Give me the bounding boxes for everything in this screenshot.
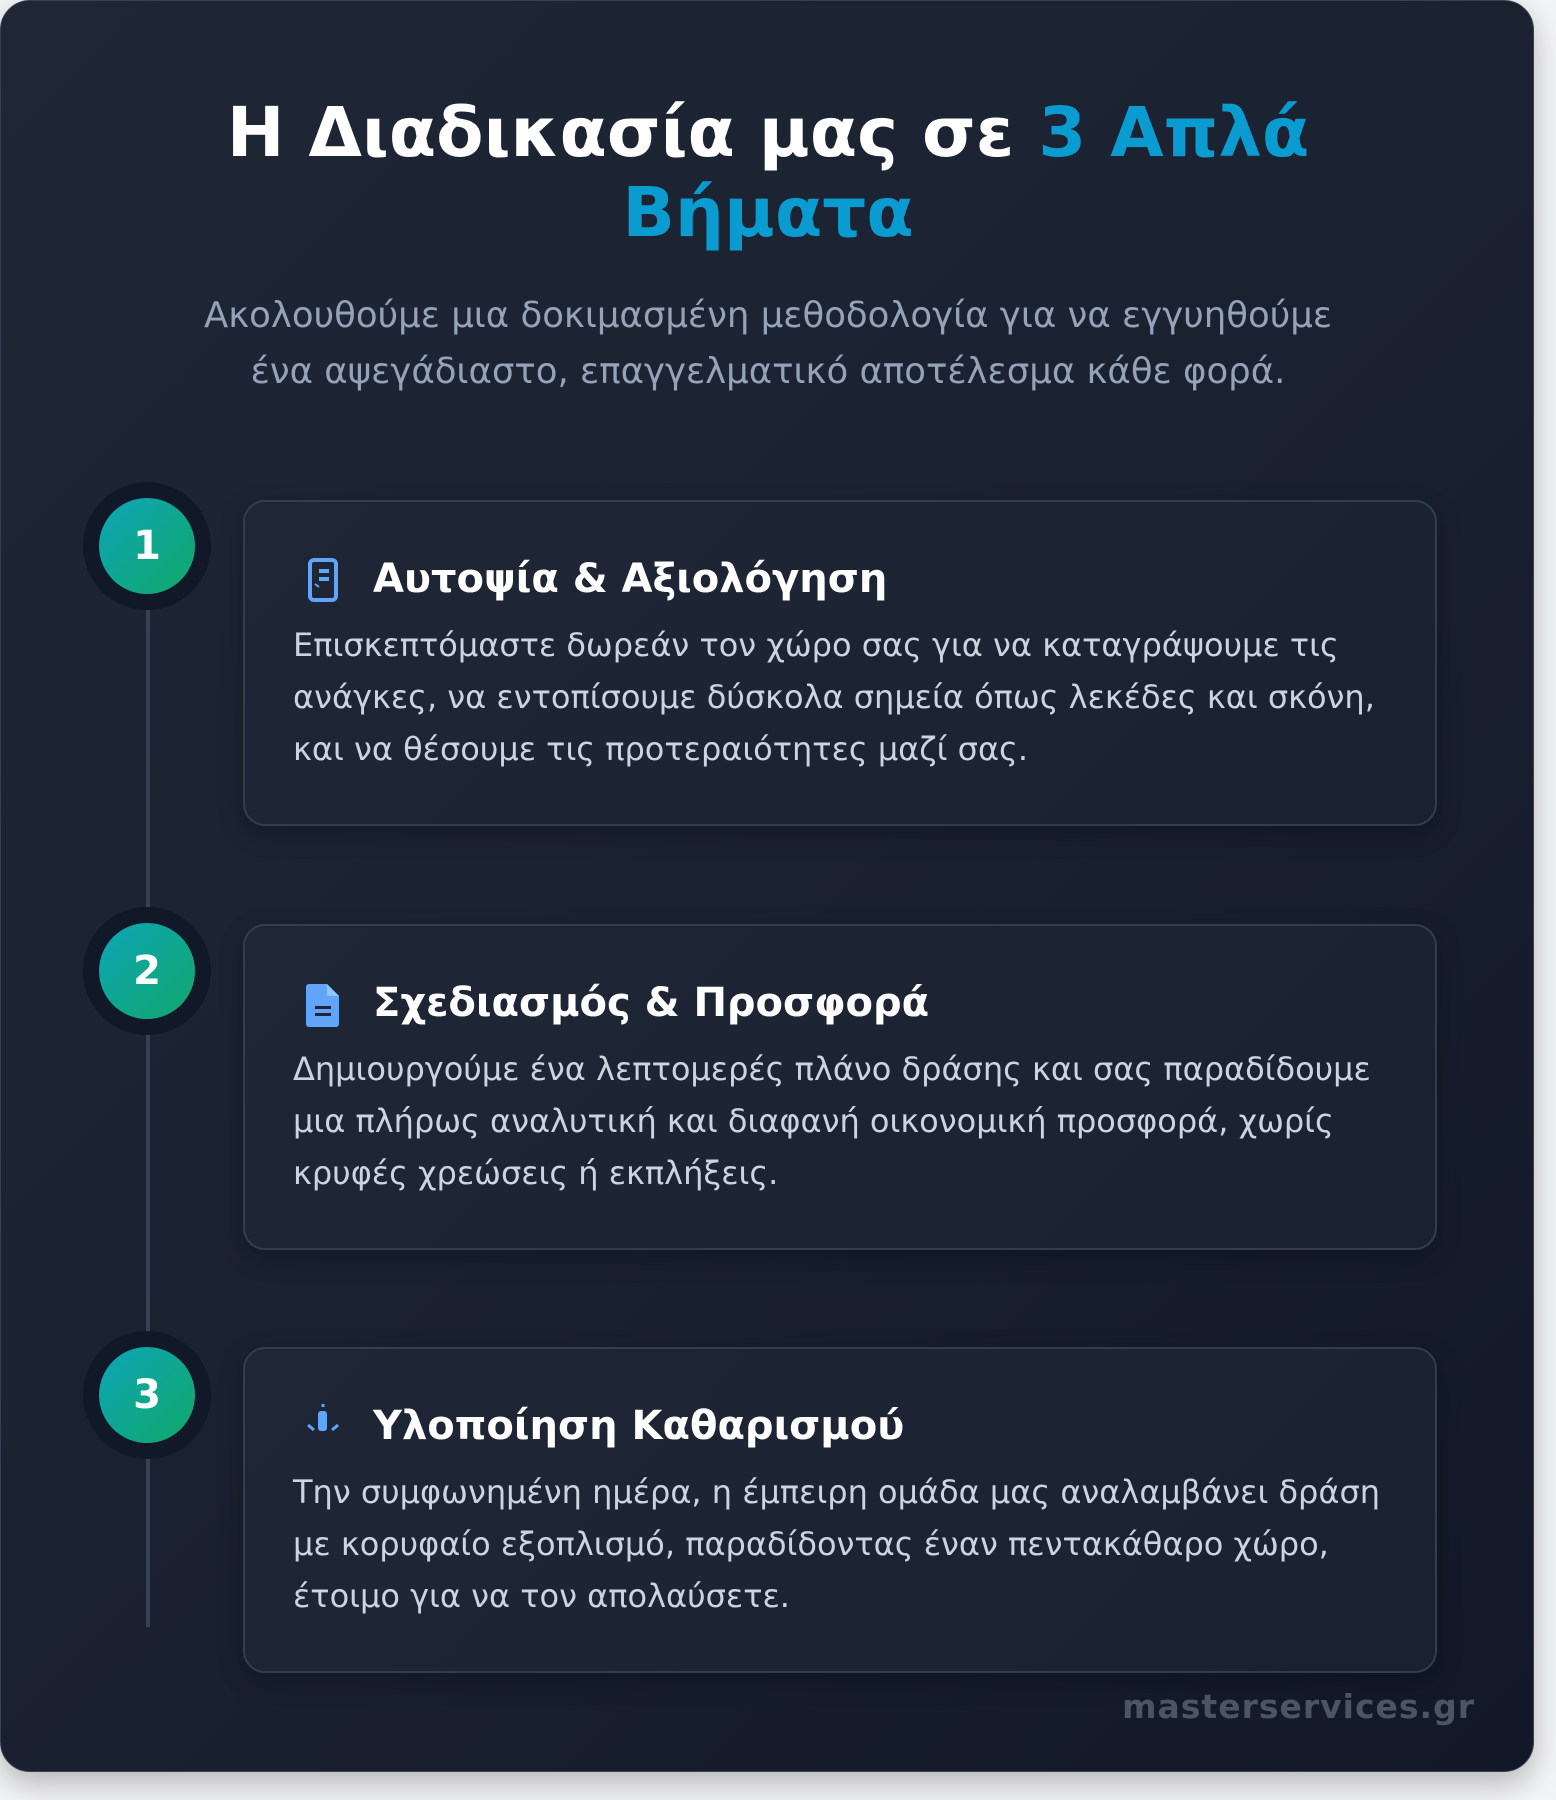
step 1 number: 1 bbox=[133, 523, 161, 569]
text: step 2: Δημιουργούμε ένα λεπτομερές πλάνο δράσης και σας παραδίδουμε μια πλήρως αναλυτική και διαφανή οικονομική προσφορά, χωρίς κρυφές χρεώσεις ή εκπλήξεις. bbox=[293, 1050, 1371, 1192]
step 1 number bbox=[83, 482, 211, 610]
icon: spray bbox=[307, 1404, 339, 1432]
heading: step 3: Υλοποίηση Καθαρισμού bbox=[373, 1403, 904, 1449]
timeline line bbox=[146, 601, 150, 1627]
title bbox=[227, 93, 1309, 253]
footer brand: masterservices.gr bbox=[1122, 1687, 1475, 1726]
icon: document bbox=[306, 984, 339, 1027]
text: step 1: Επισκεπτόμαστε δωρεάν τον χώρο σας για να καταγράψουμε τις ανάγκες, να εντοπίσουμε δύσκολα σημεία όπως λεκέδες και σκόνη, και να θέσουμε τις προτεραιότητες μαζί σας. bbox=[293, 626, 1375, 768]
subtitle: Ακολουθούμε μια δοκιμασμένη μεθοδολογία για να εγγυηθούμε bbox=[204, 295, 1332, 336]
panel: step 2 bbox=[243, 924, 1437, 1250]
title: Η Διαδικασία μας σε 3 Απλά bbox=[227, 93, 1309, 173]
panel: step 1 bbox=[243, 500, 1437, 826]
text: step 3: Την συμφωνημένη ημέρα, η έμπειρη ομάδα μας αναλαμβάνει δράση με κορυφαίο εξοπλισμό, παραδίδοντας έναν πεντακάθαρο χώρο, έτοιμο για να τον απολαύσετε. bbox=[293, 1473, 1380, 1615]
heading: step 1: Αυτοψία & Αξιολόγηση bbox=[373, 556, 887, 602]
step 2 number: 2 bbox=[133, 948, 161, 994]
icon: clipboard bbox=[308, 558, 338, 602]
subtitle bbox=[204, 295, 1332, 392]
panel: step 3 bbox=[243, 1347, 1437, 1673]
step 3 number bbox=[83, 1331, 211, 1459]
title: Βήματα bbox=[622, 173, 914, 253]
heading: step 2: Σχεδιασμός & Προσφορά bbox=[373, 980, 929, 1026]
step 2 number bbox=[83, 907, 211, 1035]
step 3 number: 3 bbox=[133, 1372, 161, 1418]
subtitle: ένα αψεγάδιαστο, επαγγελματικό αποτέλεσμα κάθε φορά. bbox=[251, 351, 1285, 392]
